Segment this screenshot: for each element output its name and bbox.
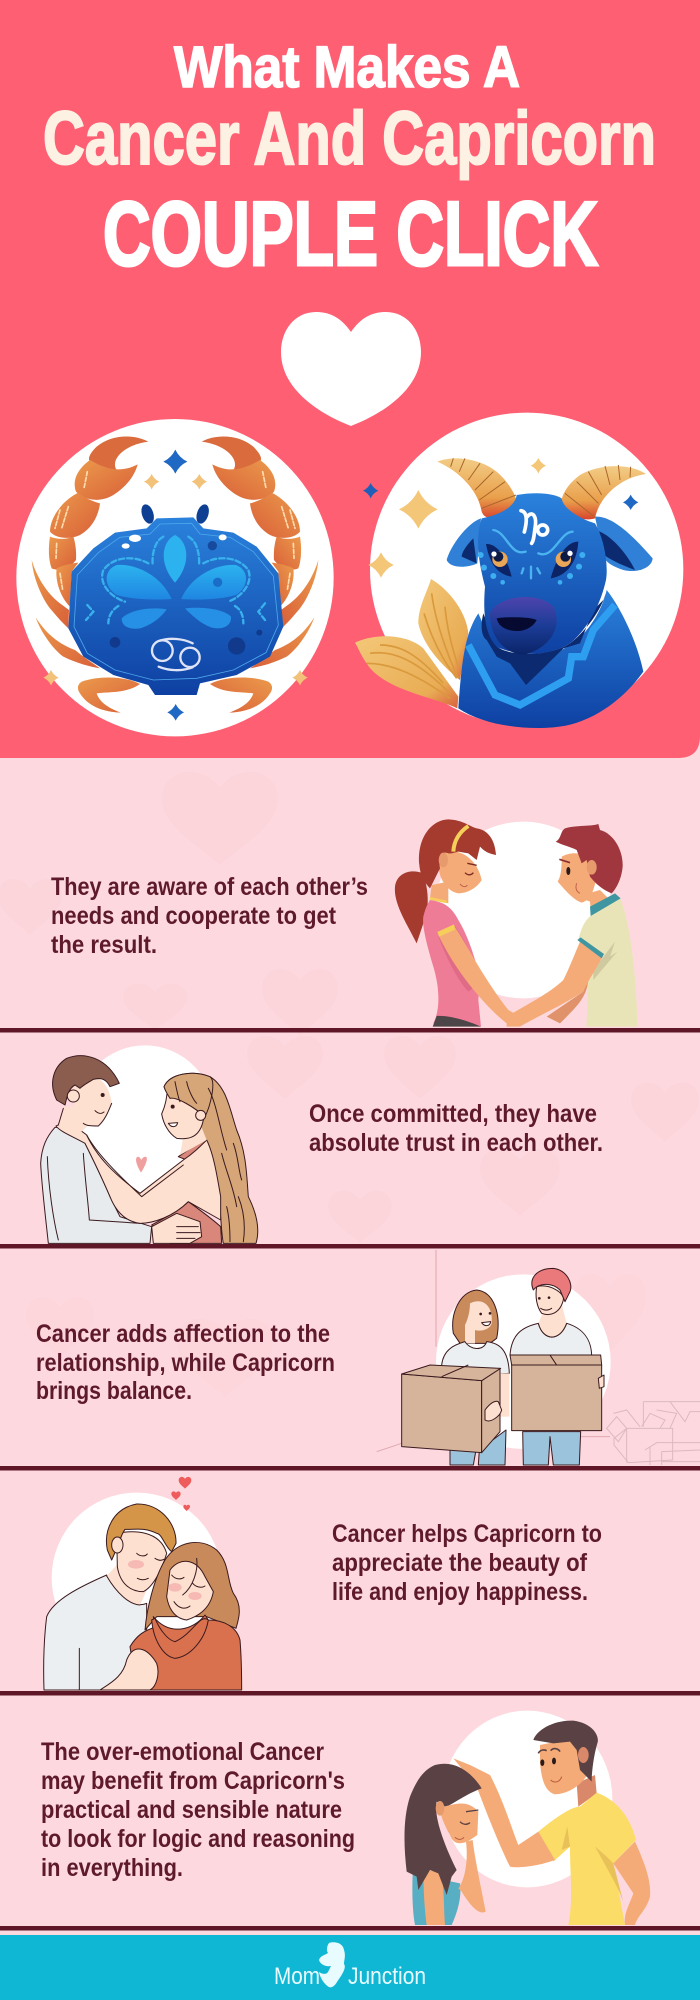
icon: heart: [281, 312, 421, 426]
panel 4 text: appreciate the beauty of: [332, 1549, 588, 1577]
capricorn symbol: [521, 511, 548, 543]
crab sparkles: [43, 450, 308, 721]
panel: header background: [0, 0, 700, 758]
small heart: [136, 1157, 147, 1173]
boy: [507, 824, 637, 1027]
box held by woman: [402, 1365, 502, 1453]
woman hair back: [164, 1073, 258, 1243]
divider 3: [0, 1466, 700, 1470]
logo mark: [319, 1942, 345, 1987]
panel 1 text: [51, 873, 368, 959]
floating hearts: [171, 1477, 191, 1511]
dress: [152, 1202, 222, 1243]
divider 2: [0, 1244, 700, 1248]
goat head: [478, 493, 607, 654]
face markings: [478, 530, 585, 585]
ears: [447, 517, 653, 571]
eyes: [486, 542, 578, 578]
stacked line-art boxes: [607, 1402, 700, 1465]
muzzle: [490, 597, 557, 655]
panel 1 text: the result.: [51, 931, 157, 959]
panel 4 text: life and enjoy happiness.: [332, 1578, 588, 1606]
crab right limbs: [202, 436, 318, 713]
crab left limbs: [32, 436, 148, 713]
panel 5 text: to look for logic and reasoning: [41, 1825, 355, 1853]
man hand: [152, 1213, 202, 1243]
title: [43, 35, 656, 285]
cancer symbol: [152, 639, 200, 670]
panel 3: background hearts: [26, 1274, 646, 1397]
panel 4 text: Cancer helps Capricorn to: [332, 1520, 602, 1548]
nose: [497, 617, 537, 631]
clasped hands: [100, 1649, 158, 1690]
box held by man: [510, 1355, 604, 1431]
panel 1: illustration holding hands: [395, 819, 637, 1027]
shell pattern: [74, 523, 278, 680]
panel 3 text: Cancer adds affection to the: [36, 1320, 330, 1348]
woman: [130, 1542, 242, 1690]
man: [453, 1721, 650, 1925]
panel 2: background hearts: [247, 1036, 699, 1243]
woman arm and torso: [56, 1124, 221, 1223]
wall and floor lines: [377, 1250, 610, 1452]
panel 1 text: They are aware of each other’s: [51, 873, 368, 901]
title line 1: What Makes A: [174, 35, 520, 100]
panel 2: illustration embracing couple: [41, 1045, 258, 1243]
panel 2 text: [309, 1100, 603, 1157]
divider 5: [0, 1926, 700, 1930]
panel 1: background hearts: [0, 772, 338, 1036]
panel 4: illustration cuddling couple: [44, 1477, 242, 1690]
wordmark: Mom: [274, 1963, 320, 1990]
logo: MomJunction: [274, 1942, 426, 1990]
man: [44, 1504, 176, 1690]
panel 5: illustration comforting couple: [404, 1711, 650, 1925]
sparkles: [363, 458, 638, 578]
panel 1 text: needs and cooperate to get: [51, 902, 337, 930]
icon: cancer crab badge: [16, 419, 334, 736]
panel 2 text: absolute trust in each other.: [309, 1129, 603, 1157]
panel 5 text: practical and sensible nature: [41, 1796, 342, 1824]
panel 5 text: in everything.: [41, 1854, 183, 1882]
panel 3 text: brings balance.: [36, 1377, 192, 1405]
woman: [442, 1290, 509, 1465]
woman: [404, 1764, 486, 1925]
panel 3: illustration couple with boxes: [377, 1250, 700, 1465]
goat body: [458, 590, 643, 728]
crab eyes: [139, 503, 211, 525]
footer band: [0, 1935, 700, 2000]
panel 3 text: relationship, while Capricorn: [36, 1349, 335, 1377]
girl: [395, 819, 520, 1027]
woman head: [162, 1073, 244, 1242]
man: [510, 1268, 592, 1465]
panel 4 text: [332, 1520, 602, 1606]
man: [41, 1127, 152, 1243]
divider 1: [0, 1028, 700, 1032]
divider 4: [0, 1691, 700, 1696]
panel 5 text: The over-emotional Cancer: [41, 1738, 324, 1766]
horns: [437, 458, 646, 519]
leaf tail: [355, 579, 468, 708]
panel 5 text: may benefit from Capricorn's: [41, 1767, 345, 1795]
logo: MomJunction: Junction: [348, 1963, 426, 1990]
body collar: [468, 605, 615, 705]
panel 5 text: [41, 1738, 355, 1882]
panel 2 text: Once committed, they have: [309, 1100, 597, 1128]
mane: [482, 592, 607, 685]
crab shell: [68, 517, 283, 695]
icon: capricorn goat badge: [355, 413, 683, 728]
man head: [53, 1056, 119, 1132]
panel 3 text: [36, 1320, 335, 1405]
